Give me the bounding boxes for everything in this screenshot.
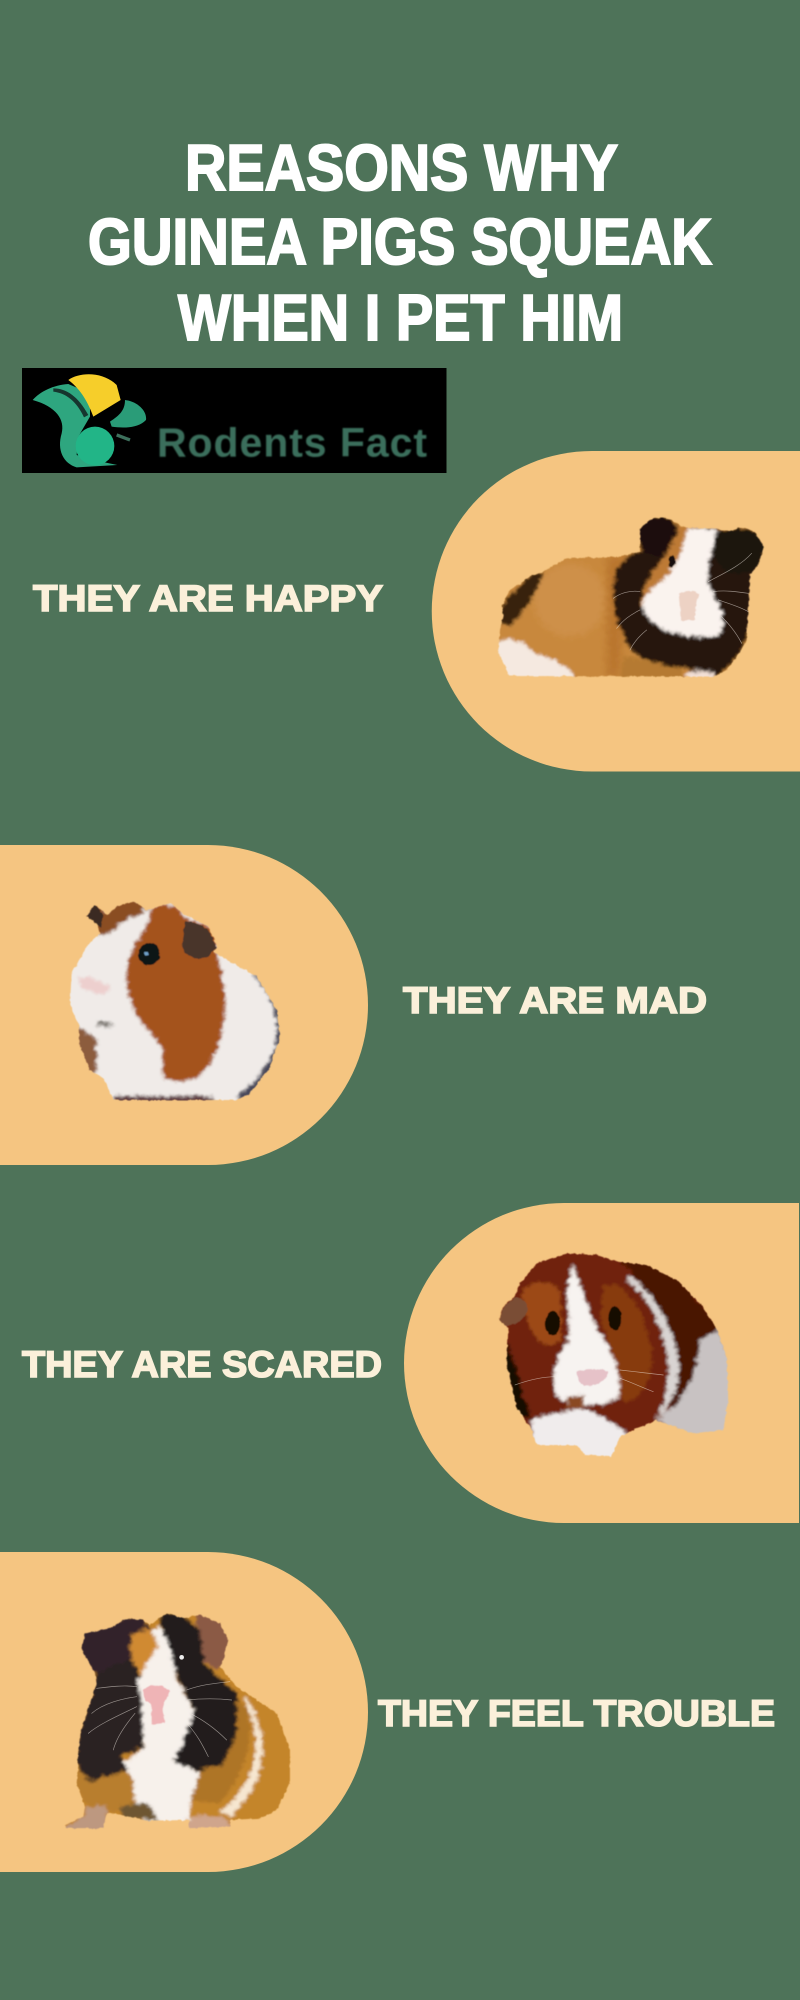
label: they are mad: THEY ARE MAD [403,980,707,1021]
panel: trouble [0,1552,368,1872]
logo: Rodents Fact [22,368,446,473]
icon: brown and white guinea pig [69,901,281,1102]
section: they are scared [22,1203,799,1523]
section: they are mad [0,845,707,1165]
section: they are happy [33,451,800,772]
icon: dark red guinea pig facing front [498,1252,729,1458]
panel: happy [432,451,800,772]
section: they feel trouble [0,1552,775,1872]
logo wordmark: Rodents Fact [157,420,427,466]
icon: tricolour guinea pig facing front [64,1613,291,1830]
label: they are scared: THEY ARE SCARED [22,1344,382,1385]
icon: squirrel [33,374,146,467]
icon: tortoiseshell guinea pig side view [497,516,764,678]
label: they feel trouble: THEY FEEL TROUBLE [378,1693,775,1734]
title: GUINEA PIGS SQUEAK [88,205,712,278]
title: REASONS WHY [185,131,618,204]
panel: mad [0,845,368,1165]
title [88,131,712,354]
title: WHEN I PET HIM [178,281,623,354]
panel: scared [404,1203,799,1523]
label: they are happy: THEY ARE HAPPY [33,578,383,619]
